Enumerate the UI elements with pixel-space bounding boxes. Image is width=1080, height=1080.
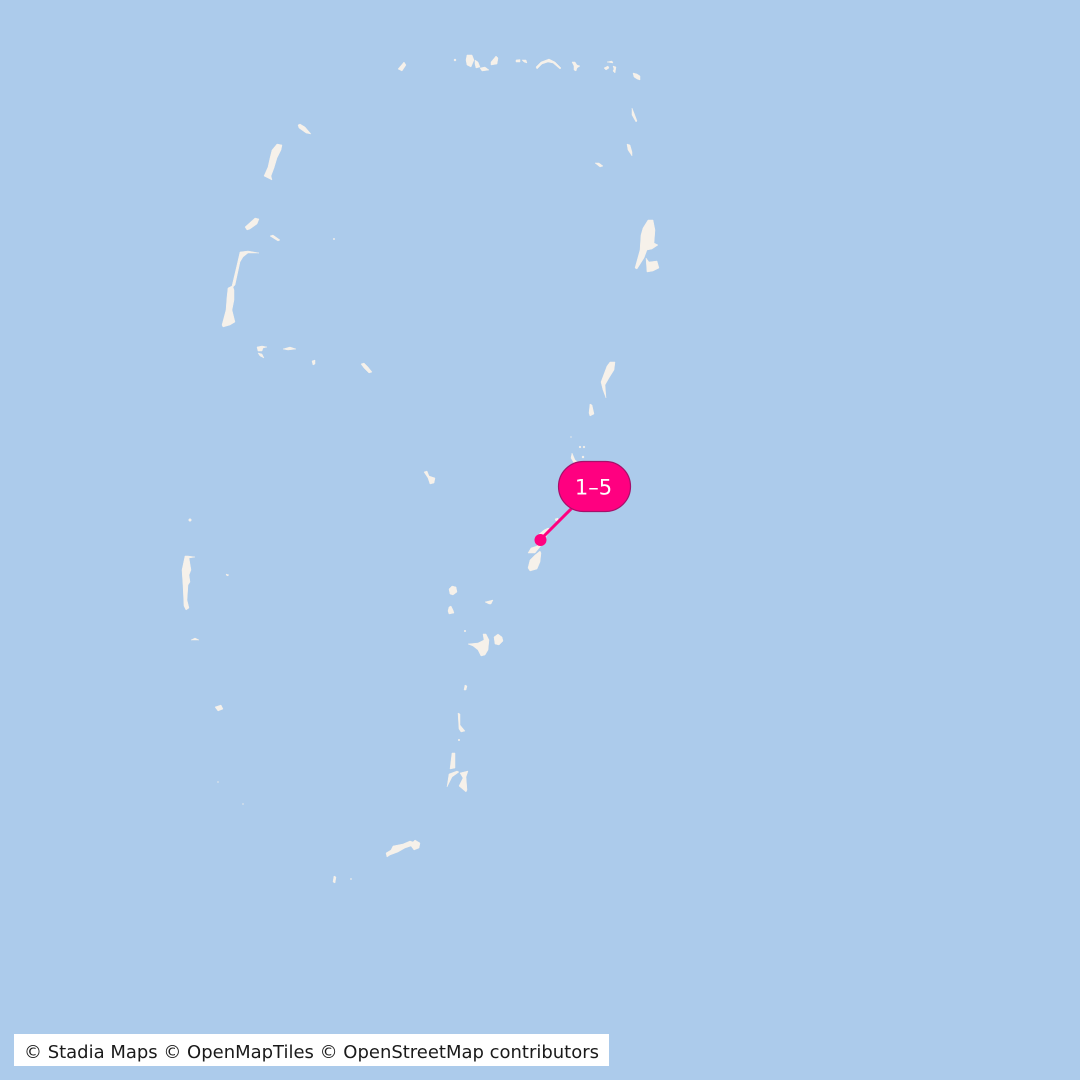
attribution: © Stadia Maps © OpenMapTiles © OpenStreetMap contributors [24,1042,599,1063]
attribution [14,1034,609,1066]
islands: central group [448,518,558,656]
islands: south-western group [182,519,244,804]
islands: northern arc [398,55,640,167]
islands: southern group [333,685,468,883]
marker: location pin with label [534,462,630,546]
islands: eastern chain [424,220,659,484]
islands: north-western group [222,124,372,373]
marker: location pin with label: 1–5 [575,476,612,500]
